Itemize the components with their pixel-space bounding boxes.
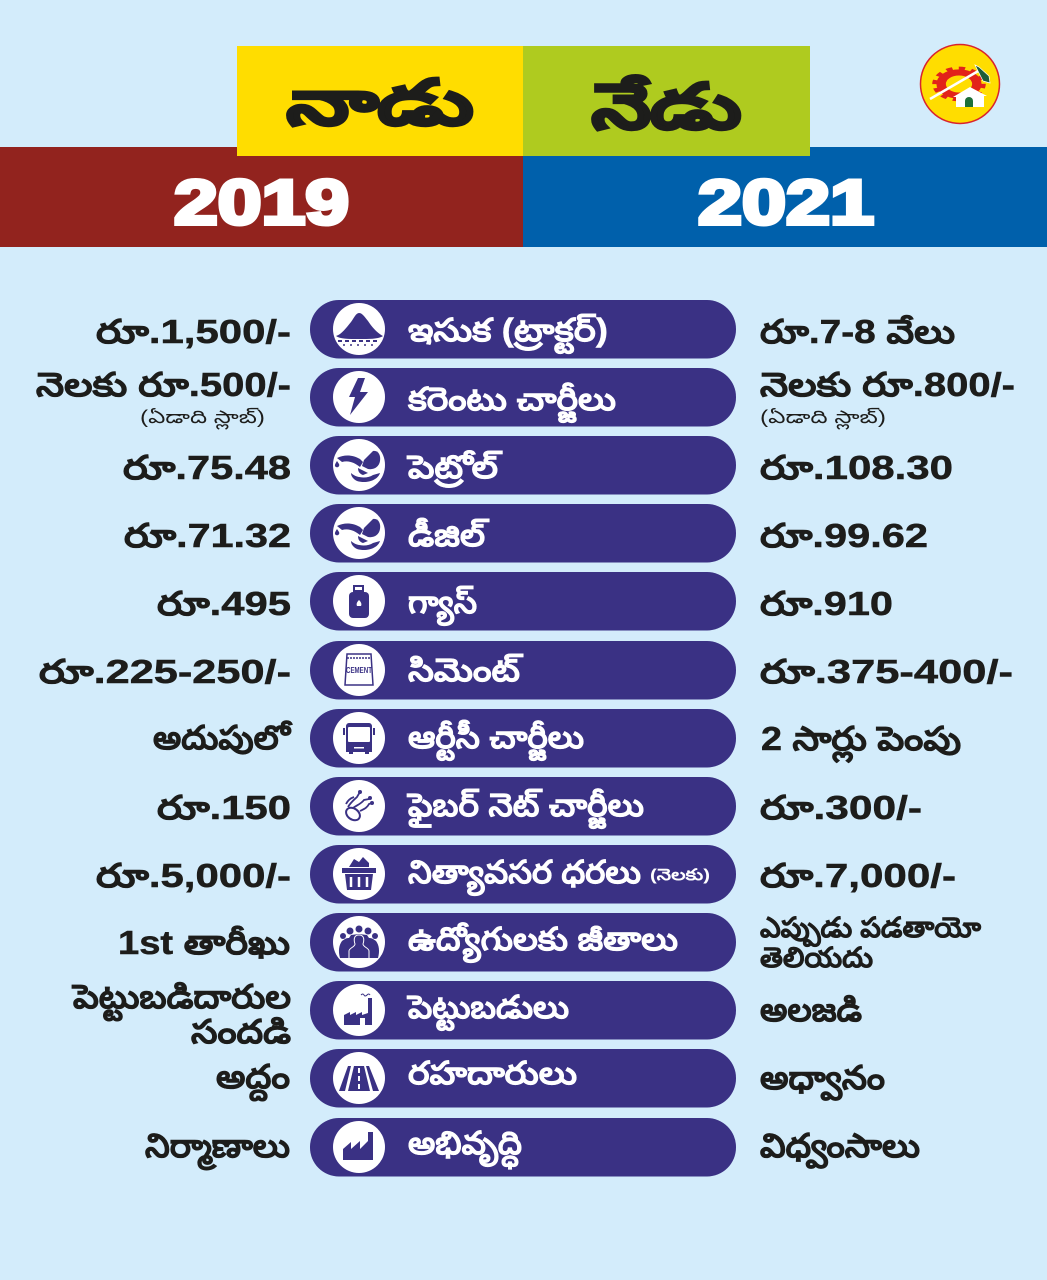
heading: then (yellow): నాడు <box>287 69 473 138</box>
pill <box>310 709 736 768</box>
row: salaries <box>118 912 982 973</box>
row: investments <box>71 978 863 1050</box>
header band: 2021: 2021 <box>698 168 874 238</box>
label: రహదారులు <box>408 1055 577 1091</box>
value 2019 line 1: పెట్టుబడిదారుల <box>71 978 291 1022</box>
pill <box>310 436 736 494</box>
pill <box>310 572 736 630</box>
pill <box>310 300 736 358</box>
row: development <box>145 1118 920 1176</box>
pill <box>310 981 736 1040</box>
value 2019: రూ.150 <box>157 789 291 826</box>
row: sand <box>96 300 955 358</box>
label: పెట్రోల్ <box>406 449 503 488</box>
value 2019: రూ.225-250/- <box>39 653 291 690</box>
label: ఆర్టీసీ చార్జీలు <box>408 719 584 761</box>
icon: fuel nozzle <box>333 439 385 491</box>
icon: sand pile <box>333 303 385 355</box>
value 2021: అధ్వానం <box>760 1059 885 1101</box>
value 2021: రూ.7-8 వేలు <box>760 313 955 350</box>
icon: factory with chimney <box>333 984 385 1036</box>
row: cement <box>39 641 1013 700</box>
value 2021: విధ్వంసాలు <box>760 1127 920 1169</box>
value 2021: 2 సార్లు పెంపు <box>761 720 961 763</box>
label: అభివృద్ధి <box>408 1125 522 1170</box>
header band: 2019 <box>0 147 523 247</box>
label: సిమెంట్ <box>408 652 524 688</box>
value 2021: రూ.910 <box>760 585 893 622</box>
icon: lightning <box>333 371 385 423</box>
icon: employees <box>333 916 385 968</box>
icon: road <box>333 1052 385 1104</box>
value 2019: నెలకు రూ.500/- <box>36 366 291 403</box>
heading: now (green): నేడు <box>592 73 741 142</box>
value 2021: రూ.300/- <box>760 789 922 826</box>
value 2021: రూ.99.62 <box>760 517 928 554</box>
value 2019: రూ.495 <box>157 585 291 622</box>
value 2021: రూ.375-400/- <box>760 653 1013 690</box>
label: పెట్టుబడులు <box>406 989 569 1031</box>
value 2021: రూ.7,000/- <box>760 857 956 894</box>
row: gas <box>157 572 893 630</box>
label: కరెంటు చార్జీలు <box>407 381 616 423</box>
pill <box>310 641 736 700</box>
label: నిత్యావసర ధరలు <box>408 854 641 896</box>
value 2019: రూ.71.32 <box>124 517 291 554</box>
icon: fuel nozzle <box>333 507 385 559</box>
value 2021: రూ.108.30 <box>760 449 953 486</box>
value 2019: అదుపులో <box>153 719 293 756</box>
header band: 2019: 2019 <box>174 168 349 238</box>
pill <box>310 368 736 426</box>
value 2021 line 1: ఎప్పుడు పడతాయో <box>760 912 982 947</box>
heading: then (yellow) <box>237 46 523 156</box>
label: ఫైబర్ నెట్ చార్జీలు <box>406 787 644 829</box>
value 2019: నిర్మాణాలు <box>145 1127 290 1171</box>
row: diesel <box>124 504 928 562</box>
value 2019: అద్దం <box>216 1058 290 1102</box>
label: డీజిల్ <box>408 517 490 553</box>
pill <box>310 1118 736 1176</box>
value 2019: 1st తారీఖు <box>118 924 290 961</box>
pill <box>310 504 736 562</box>
pill <box>310 845 736 904</box>
slab note 2021: (ఏడాది స్లాబ్) <box>760 407 886 430</box>
pill <box>310 777 736 836</box>
icon: fiber cable <box>333 780 385 832</box>
icon: bus <box>333 712 385 764</box>
label: ఉద్యోగులకు జీతాలు <box>408 921 678 963</box>
label: గ్యాస్ <box>408 584 477 626</box>
row: bus <box>153 709 961 768</box>
icon: factory <box>333 1121 385 1173</box>
value 2021: అలజడి <box>760 991 863 1028</box>
icon: gas cylinder <box>333 575 385 627</box>
value 2019 line 2: సందడి <box>191 1013 292 1050</box>
icon: basket <box>333 848 385 900</box>
icon: cement bag <box>333 644 385 696</box>
value 2021: నెలకు రూ.800/- <box>760 366 1015 403</box>
value 2019: రూ.1,500/- <box>96 313 291 350</box>
header band: 2021 <box>523 147 1047 247</box>
value 2019: రూ.5,000/- <box>96 857 291 894</box>
icon: cement bag: CEMENT <box>346 666 372 675</box>
row: fiber net <box>157 777 922 836</box>
icon: party logo <box>920 44 1000 124</box>
value 2021 line 2: తెలియదు <box>760 942 873 973</box>
row: electricity <box>36 366 1015 430</box>
heading: now (green) <box>523 46 810 156</box>
slab note 2019: (ఏడాది స్లాబ్) <box>140 407 265 430</box>
label: ఇసుక (ట్రాక్టర్) <box>408 312 608 354</box>
label note: (నెలకు) <box>650 867 710 884</box>
value 2019: రూ.75.48 <box>123 449 291 486</box>
row: petrol <box>123 436 953 494</box>
row: roads <box>216 1049 885 1108</box>
row: essentials <box>96 845 956 904</box>
pill <box>310 1049 736 1108</box>
pill <box>310 913 736 972</box>
